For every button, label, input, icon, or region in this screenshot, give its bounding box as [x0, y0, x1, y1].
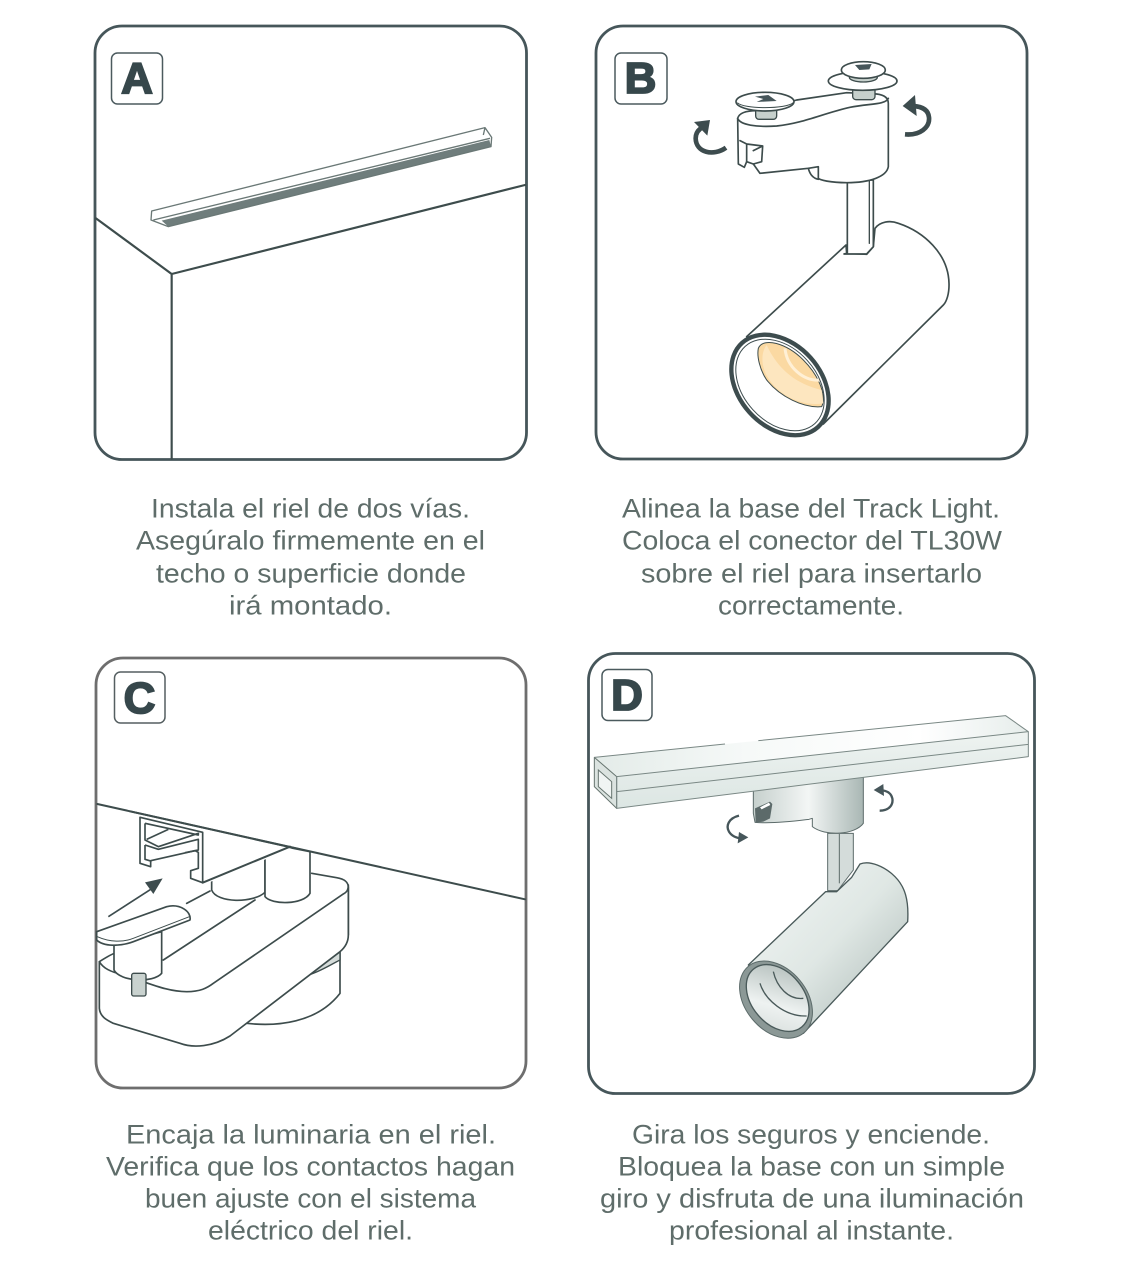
- warm lit interior: [714, 318, 846, 452]
- installed track light: [725, 777, 908, 1053]
- screw stems: [756, 107, 777, 119]
- caption C: buen ajuste con el sistema: [145, 1184, 477, 1214]
- caption B: sobre el riel para insertarlo: [641, 558, 982, 588]
- caption C: eléctrico del riel.: [208, 1216, 413, 1246]
- caption D: Bloquea la base con un simple: [618, 1152, 1005, 1182]
- panel A: mount the rail: [95, 26, 526, 460]
- track rail: [594, 716, 1028, 808]
- caption A: Instala el riel de dos vías.: [151, 494, 470, 524]
- caption A: irá montado.: [229, 590, 392, 620]
- front ring: [712, 315, 848, 455]
- cylinder posts: [212, 858, 265, 900]
- left washer: [736, 92, 794, 111]
- icon: right rotation arrow: [903, 95, 929, 134]
- stem: [828, 833, 853, 891]
- track light spotlight: [712, 62, 949, 455]
- lock tab: [755, 802, 772, 822]
- panel D: turn the locks: [588, 654, 1034, 1094]
- connector: [753, 777, 863, 833]
- caption C: Encaja la luminaria en el riel.: [126, 1120, 496, 1150]
- badge A: [112, 53, 162, 104]
- caption D: giro y disfruta de una iluminación: [600, 1184, 1024, 1214]
- panel C: fit the luminaire: [96, 658, 526, 1088]
- front ring: [725, 947, 827, 1053]
- badge D: [602, 670, 652, 720]
- icon: left rotation arrow: [694, 120, 726, 152]
- badge C: C: [124, 674, 155, 723]
- cylinder body: [747, 222, 949, 424]
- main block: [99, 885, 348, 1046]
- caption B: correctamente.: [718, 590, 904, 620]
- badge D: D: [611, 671, 643, 720]
- upper block far edge: [312, 873, 348, 935]
- badge C: [114, 672, 165, 723]
- grey sliver: [308, 952, 340, 975]
- connector body: [738, 93, 888, 183]
- caption B: Coloca el conector del TL30W: [622, 526, 1003, 556]
- icon: left rotation arrow: [728, 816, 748, 843]
- icon: right rotation arrow: [874, 784, 892, 811]
- badge B: [615, 53, 667, 104]
- pin: [132, 973, 146, 996]
- caption A: [136, 494, 485, 620]
- caption B: Alinea la base del Track Light.: [622, 494, 1000, 524]
- caption C: [106, 1120, 515, 1246]
- caption A: Asegúralo firmemente en el: [136, 526, 485, 556]
- panel B: align the track light: [596, 26, 1027, 459]
- caption A: techo o superficie donde: [156, 558, 466, 588]
- ceiling line: [97, 804, 525, 899]
- cylinder: [748, 863, 908, 1033]
- stem: [844, 180, 873, 254]
- caption D: Gira los seguros y enciende.: [632, 1120, 990, 1150]
- badge B: B: [625, 54, 656, 103]
- caption B: [622, 494, 1003, 620]
- ceiling and wall lines: [96, 185, 525, 459]
- arrow: insert direction: [108, 878, 163, 917]
- lower cylinder: [247, 952, 340, 1024]
- caption D: profesional al instante.: [669, 1216, 954, 1246]
- right washer and screw: [828, 72, 897, 90]
- connector illustration: [97, 804, 525, 1046]
- caption C: Verifica que los contactos hagan: [106, 1152, 515, 1182]
- badge A: A: [121, 54, 153, 103]
- rail profile: [130, 811, 300, 883]
- lever latch: [114, 932, 162, 980]
- two-way rail: [151, 128, 492, 227]
- caption D: [600, 1120, 1024, 1246]
